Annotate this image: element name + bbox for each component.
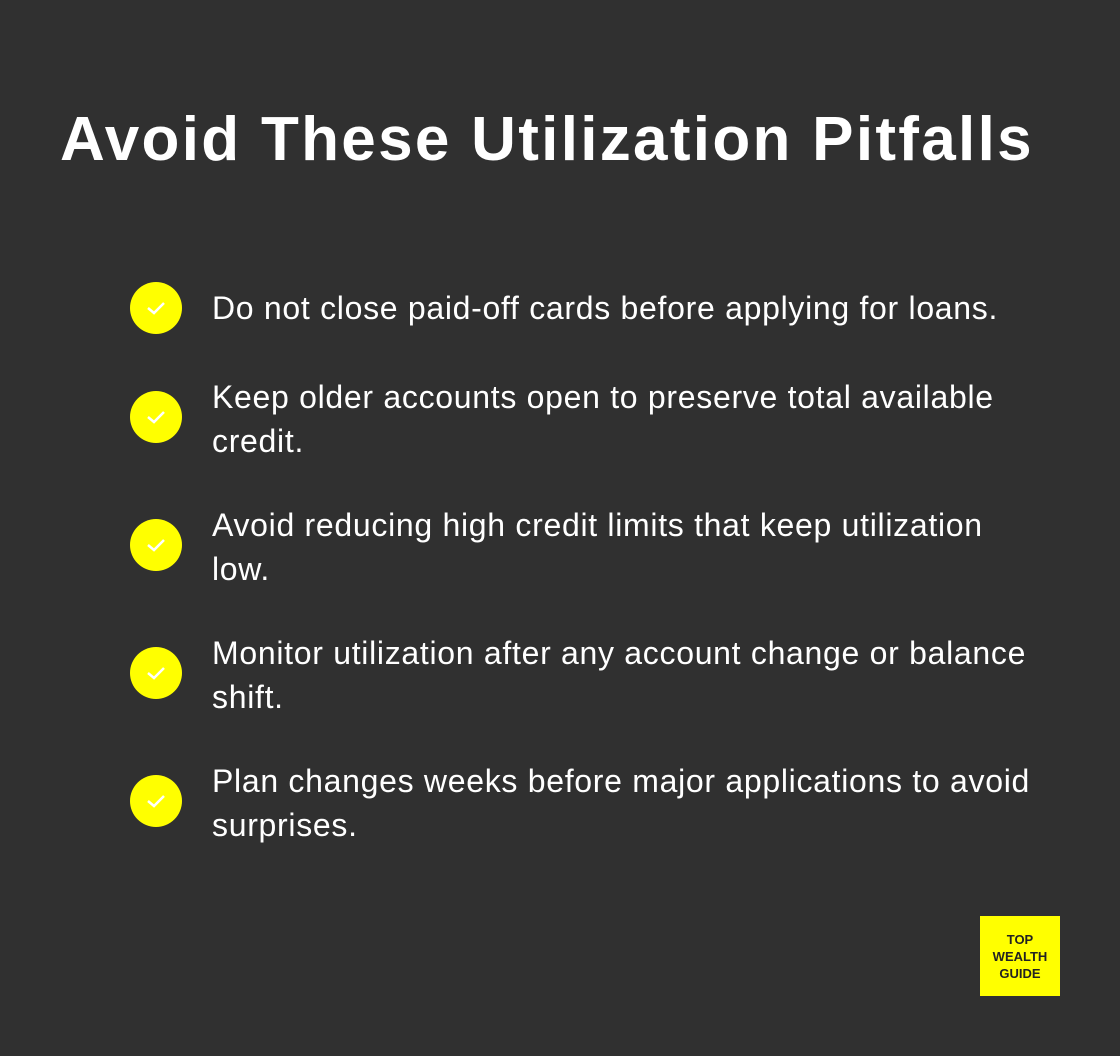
text 4: Monitor utilization after any account change or balance	[212, 635, 1026, 671]
text 2: credit.	[212, 423, 304, 459]
logo: WEALTH	[993, 948, 1047, 964]
text 5	[212, 763, 1030, 843]
text 3: Avoid reducing high credit limits that keep utilization	[212, 507, 983, 543]
text 5: surprises.	[212, 807, 358, 843]
icon: check	[130, 391, 182, 443]
text 4: shift.	[212, 679, 284, 715]
item 4	[130, 635, 1026, 715]
logo	[980, 916, 1060, 996]
text 4	[212, 635, 1026, 715]
icon: check	[130, 282, 182, 334]
title: Avoid These Utilization Pitfalls	[60, 105, 1034, 174]
item 2	[130, 379, 994, 459]
text 1: Do not close paid-off cards before applying for loans.	[212, 290, 998, 326]
text 3	[212, 507, 983, 587]
item 5	[130, 763, 1030, 843]
text 2	[212, 379, 994, 459]
icon: check	[130, 775, 182, 827]
item 3	[130, 507, 983, 587]
logo: GUIDE	[999, 966, 1041, 980]
icon: check	[130, 647, 182, 699]
text 3: low.	[212, 551, 270, 587]
item 1	[130, 282, 998, 334]
text 5: Plan changes weeks before major applications to avoid	[212, 763, 1030, 799]
icon: check	[130, 519, 182, 571]
logo: TOP	[1007, 932, 1033, 946]
text 2: Keep older accounts open to preserve total available	[212, 379, 994, 415]
